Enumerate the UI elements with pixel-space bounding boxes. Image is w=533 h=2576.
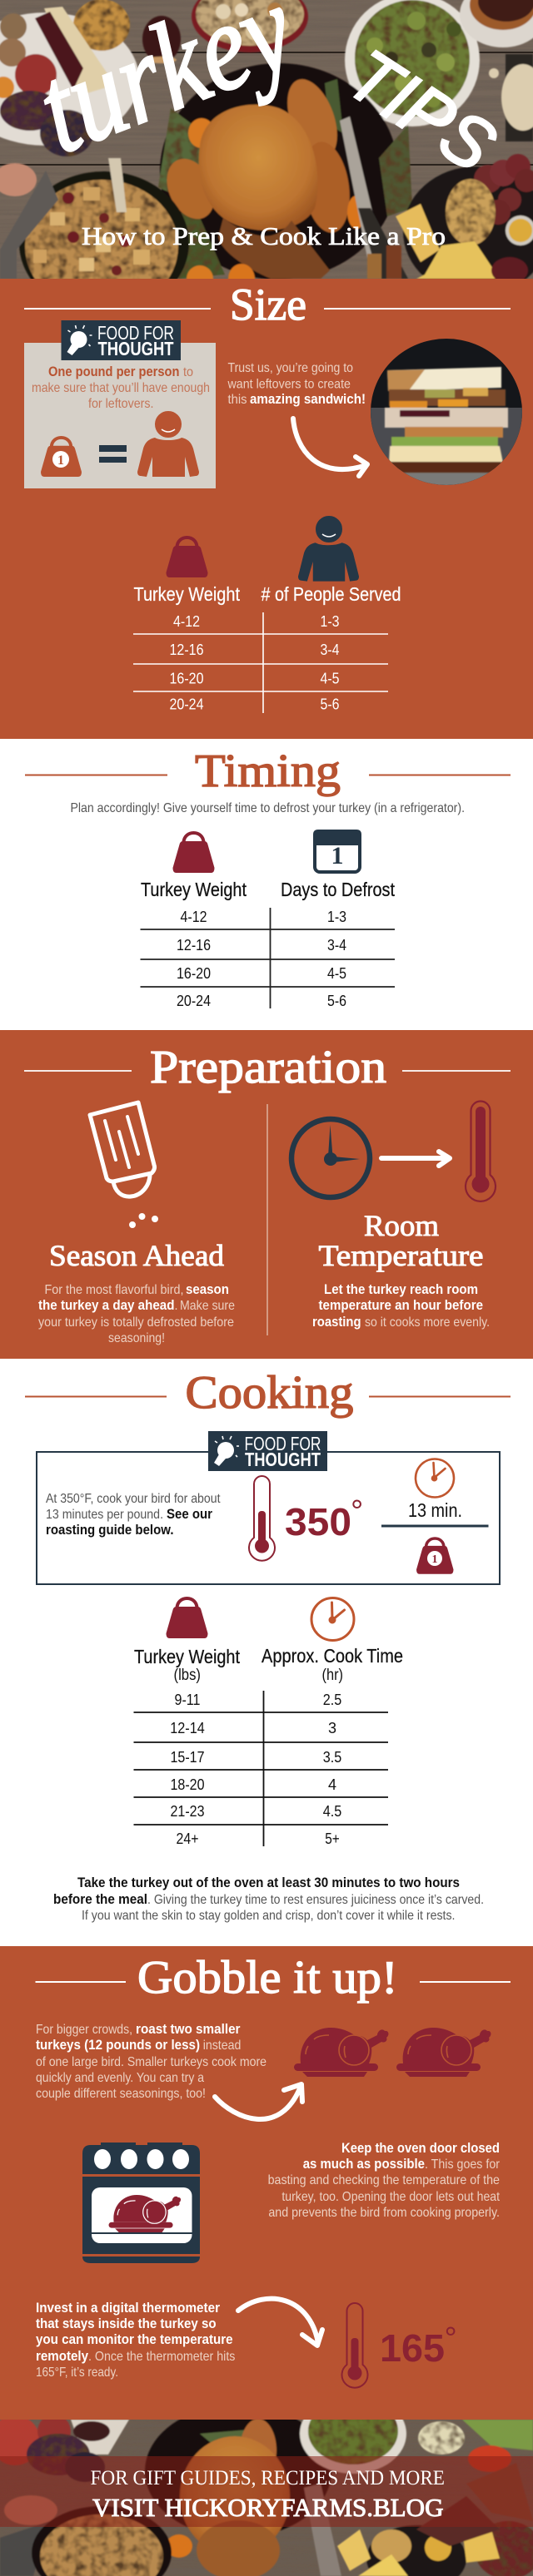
number: 165 degrees: °: [445, 2321, 457, 2356]
text: two smaller turkeys: instead: [203, 2039, 241, 2053]
callout text: to: [183, 365, 193, 379]
badge: food for thought: [208, 1431, 327, 1471]
icon: two turkeys: [294, 2028, 491, 2077]
table: cook time: (lbs): [173, 1667, 201, 1684]
icon: salt shaker: [90, 1102, 157, 1227]
text: rest the turkey: before the meal: [53, 1892, 147, 1907]
table: people served: [133, 583, 401, 713]
column: room temperature: so it cooks more evenly.: [365, 1315, 490, 1330]
text: digital thermometer: 165°F, it’s ready.: [36, 2365, 118, 2380]
heading: preparation: Preparation: [150, 1042, 386, 1093]
callout text: make sure that you’ll have enough: [32, 381, 210, 395]
table: people served: 1-3: [320, 613, 340, 630]
table: people served: Turkey Weight: [133, 583, 241, 605]
icon: person: [298, 515, 359, 582]
panel: gobble it up: [0, 1946, 533, 2420]
table: cook time: 3.5: [323, 1749, 341, 1766]
icon: thermometer: [466, 1102, 496, 1201]
callout: one pound per person: [24, 320, 216, 488]
table: people served: 5-6: [320, 696, 340, 712]
divider: [266, 1104, 268, 1335]
table: people served: # of People Served: [262, 583, 401, 605]
icon: one pound weight: [41, 438, 82, 477]
table: cook time: 9-11: [175, 1692, 200, 1708]
table: people served: 3-4: [320, 642, 340, 658]
table: people served: 4-12: [173, 613, 200, 630]
panel: size: [0, 279, 533, 739]
icon: one pound weight: 1: [431, 1553, 438, 1566]
column: room temperature: temperature an hour before: [318, 1298, 483, 1313]
column: season ahead: seasoning!: [108, 1331, 165, 1345]
icon: one pound weight: [416, 1538, 453, 1574]
icon: equals: [99, 445, 127, 463]
icon: weight: [167, 1598, 208, 1638]
icon: clock: [291, 1119, 370, 1197]
number: 350 degrees: 350: [285, 1500, 351, 1543]
column: season ahead: .: [175, 1299, 178, 1313]
icon: thermometer: [341, 2303, 368, 2388]
text: cook time: 13 minutes per pound.: [46, 1508, 163, 1522]
table: cook time: 4: [328, 1776, 336, 1793]
icon: oven with turkey: [82, 2143, 200, 2263]
table: people served: 12-16: [170, 642, 203, 658]
column: room temperature: Let the turkey reach room: [324, 1282, 478, 1297]
subtitle: How to Prep & Cook Like a Pro: [82, 221, 446, 250]
icon: weight: [173, 833, 215, 873]
panel: timing: [25, 746, 511, 1009]
badge: food for thought: THOUGHT: [98, 338, 173, 359]
table: days to defrost: 12-16: [177, 937, 211, 954]
column: season ahead: your turkey is totally defrosted before: [38, 1315, 234, 1330]
text: cook time: [46, 1492, 221, 1538]
footer text: [90, 2467, 445, 2522]
text: keep the oven door closed: . This goes for: [425, 2157, 501, 2172]
text: digital thermometer: . Once the thermometer hits: [88, 2350, 235, 2364]
text: two smaller turkeys: turkeys (12 pounds or less): [36, 2038, 200, 2053]
table: cook time: Turkey Weight: [134, 1646, 241, 1667]
text: two smaller turkeys: couple different seasonings, too!: [36, 2087, 206, 2101]
text: two smaller turkeys: of one large bird. Smaller turkeys cook more: [36, 2055, 266, 2069]
table: people served: 16-20: [170, 671, 203, 687]
table: cook time: Approx. Cook Time: [262, 1645, 403, 1667]
text: rest the turkey: [53, 1875, 484, 1923]
arrow: clock to thermometer: [381, 1152, 450, 1166]
table: people served: 4-5: [320, 671, 340, 687]
icon: clock: [416, 1459, 454, 1498]
column: season ahead: Season Ahead: [49, 1239, 224, 1272]
column: season ahead: For the most flavorful bird,: [45, 1283, 183, 1297]
table: days to defrost: 16-20: [177, 965, 211, 982]
icon: one pound weight: 1: [57, 453, 64, 468]
hero photo: turkey dinner table: [0, 0, 533, 279]
footer text: VISIT HICKORYFARMS.BLOG: [92, 2493, 443, 2522]
text: rest the turkey: Take the turkey out of the oven at least 30 minutes to two hours: [77, 1875, 460, 1890]
table: cook time: 15-17: [170, 1749, 205, 1766]
table: days to defrost: Days to Defrost: [281, 879, 396, 900]
icon: person: [137, 410, 199, 477]
text: two smaller turkeys: [36, 2022, 266, 2101]
table: cook time: 3: [328, 1720, 336, 1736]
callout text: One pound per person: [48, 364, 180, 379]
column: season ahead: [38, 1239, 235, 1345]
title: turkey TIPS: [20, 0, 510, 187]
text: plan accordingly: Plan accordingly! Give yourself time to defrost your turkey (in a refrigerator).: [70, 801, 465, 815]
callout text: [32, 364, 210, 411]
text: cook time: See our: [167, 1507, 213, 1522]
column: season ahead: Make sure: [180, 1299, 235, 1313]
text: leftovers: want leftovers to create: [227, 378, 351, 391]
icon: thermometer: [249, 1476, 275, 1561]
column: room temperature: roasting: [312, 1315, 361, 1330]
callout text: for leftovers.: [88, 397, 153, 411]
table: people served: 20-24: [170, 696, 203, 712]
arrow to turkeys: [215, 2084, 302, 2119]
heading: gobble it up: Gobble it up!: [137, 1952, 398, 2004]
table: cook time: 4.5: [323, 1803, 341, 1820]
table: cook time: 21-23: [170, 1803, 205, 1820]
text: keep the oven door closed: basting and checking the temperature of the: [268, 2173, 500, 2187]
table: days to defrost: Turkey Weight: [141, 879, 247, 900]
text: leftovers: [227, 361, 366, 407]
text: digital thermometer: [36, 2301, 235, 2380]
text: keep the oven door closed: as much as possible: [303, 2157, 425, 2172]
text: cook time: roasting guide below.: [46, 1523, 173, 1538]
heading: size: Size: [230, 280, 306, 329]
table: cook time: 2.5: [323, 1692, 341, 1708]
text: digital thermometer: remotely: [36, 2349, 89, 2364]
photo: sandwich: [371, 339, 522, 485]
table: days to defrost: 4-12: [180, 909, 207, 925]
column: room temperature: [312, 1209, 490, 1330]
text: keep the oven door closed: and prevents the bird from cooking properly.: [268, 2206, 500, 2220]
table: cook time: 24+: [177, 1830, 198, 1847]
badge: food for thought: THOUGHT: [245, 1449, 321, 1470]
text: rest the turkey: . Giving the turkey time to rest ensures juiciness once it’s carved.: [147, 1893, 484, 1907]
column: room temperature: Room: [364, 1209, 439, 1242]
table: cook time: 5+: [325, 1830, 340, 1847]
table: cook time: 12-14: [170, 1720, 205, 1736]
text: 13 min per pound: [381, 1499, 488, 1526]
column: season ahead: the turkey a day ahead: [38, 1298, 175, 1313]
number: 350 degrees: °: [351, 1494, 363, 1529]
heading: timing: Timing: [195, 746, 341, 797]
text: digital thermometer: that stays inside the turkey so: [36, 2316, 217, 2331]
callout: roasting guide: [37, 1431, 500, 1584]
text: two smaller turkeys: quickly and evenly. You can try a: [36, 2071, 204, 2085]
footer photo and band: [0, 2420, 533, 2576]
text: 13 min per pound: 13 min.: [408, 1499, 462, 1521]
column: room temperature: Temperature: [318, 1239, 483, 1272]
text: leftovers: this: [228, 393, 247, 407]
number: 165 degrees: 165: [380, 2326, 445, 2370]
badge: food for thought: FOOD FOR: [97, 322, 174, 344]
footer text: FOR GIFT GUIDES, RECIPES AND MORE: [90, 2467, 445, 2489]
table: days to defrost: 4-5: [327, 965, 346, 982]
badge: food for thought: FOOD FOR: [245, 1433, 321, 1454]
text: cook time: At 350°F, cook your bird for about: [46, 1492, 221, 1506]
table: cook time: 18-20: [170, 1776, 205, 1793]
table: days to defrost: [140, 879, 396, 1009]
arrow to sandwich: [293, 419, 367, 476]
table: days to defrost: 1-3: [327, 909, 346, 925]
text: leftovers: Trust us, you’re going to: [228, 361, 353, 375]
table: cook time: (hr): [321, 1667, 343, 1684]
text: digital thermometer: Invest in a digital thermometer: [36, 2301, 221, 2316]
text: two smaller turkeys: For bigger crowds,: [36, 2023, 132, 2037]
table: days to defrost: 20-24: [177, 993, 211, 1009]
icon: clock: [311, 1598, 354, 1641]
table: cook time: [133, 1645, 403, 1847]
icon: calendar: [315, 831, 360, 872]
heading: cooking: Cooking: [185, 1367, 353, 1419]
column: season ahead: season: [186, 1282, 229, 1297]
text: two smaller turkeys: roast two smaller: [136, 2022, 241, 2037]
text: rest the turkey: If you want the skin to stay golden and crisp, don’t cover it while it rests.: [82, 1909, 455, 1923]
panel: preparation: [0, 1030, 533, 1359]
table: days to defrost: 5-6: [327, 993, 346, 1009]
text: keep the oven door closed: [268, 2141, 501, 2220]
text: keep the oven door closed: turkey, too. Opening the door lets out heat: [281, 2190, 500, 2204]
icon: calendar: 1: [331, 842, 343, 869]
panel: cooking: [25, 1367, 511, 1923]
text: digital thermometer: you can monitor the temperature: [36, 2332, 233, 2347]
badge: food for thought: [62, 320, 181, 360]
text: leftovers: amazing sandwich!: [250, 392, 366, 407]
table: days to defrost: 3-4: [327, 937, 346, 954]
title: turkey TIPS: TIPS: [334, 33, 510, 187]
text: keep the oven door closed: Keep the oven door closed: [341, 2141, 500, 2156]
arrow to thermometer: [238, 2299, 322, 2346]
icon: weight: [167, 537, 208, 577]
